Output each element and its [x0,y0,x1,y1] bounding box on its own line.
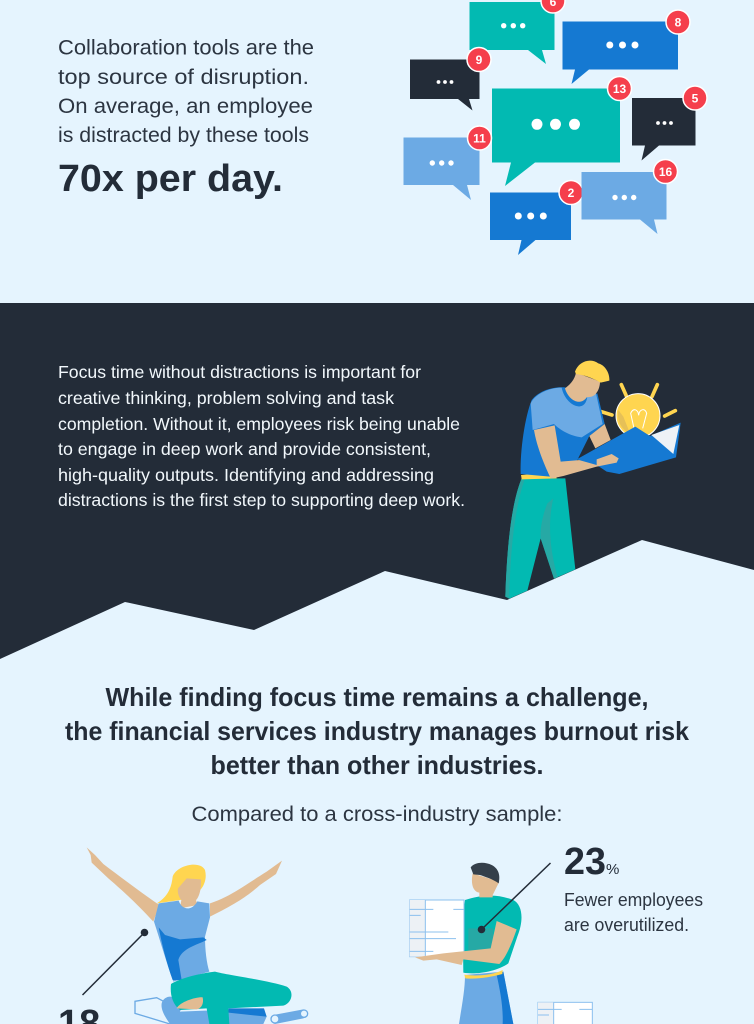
stat description: are overutilized. [564,915,689,935]
bubble: teal 6 [470,0,565,64]
shirt [154,901,210,982]
arms [87,847,282,922]
headline stat: 70x per day: 70x per day. [58,158,283,200]
paper stack on floor [538,1002,592,1024]
stat description: Fewer employees [564,890,703,910]
illustration: woman stretching on mat [87,847,308,1024]
bubble: blue 8 [562,10,690,84]
intro text block: is distracted by these tools [58,124,309,147]
intro text block: On average, an employee [58,95,313,118]
open book [577,423,681,474]
stat: 23 percent: 23% [564,841,619,883]
hair [471,863,499,883]
bubble: light blue 11: 11 [473,132,486,146]
hair [157,865,206,903]
shirt [463,896,521,973]
section heading [65,682,690,780]
stat description [564,890,703,935]
bubble: blue 8: 8 [675,16,682,30]
weights [271,1009,308,1024]
trousers [459,972,513,1024]
bubble: light blue 16: 16 [659,165,672,179]
bubble: blue 2 [490,180,583,255]
bubble: light blue 16 [582,160,678,234]
trousers [505,478,575,599]
mat and bolster [135,998,180,1024]
focus time paragraph [58,362,465,510]
bubble: dark 5: 5 [692,92,699,106]
lightbulb [600,385,675,438]
arm and hands [415,921,517,965]
focus time paragraph: Focus time without distractions is important for [58,362,421,382]
belt [521,472,557,479]
section heading: better than other industries. [210,750,544,780]
bubble: light blue 11 [404,126,492,200]
dark band with mountain edge [0,303,754,659]
bubble: blue 2: 2 [568,186,575,200]
focus time paragraph: distractions is the first step to supporting deep work. [58,490,465,510]
bubble: dark 9 [410,48,491,110]
chat bubbles illustration [404,0,707,255]
sub heading: Compared to a cross-industry sample: [192,803,562,826]
focus time paragraph: to engage in deep work and provide consistent, [58,439,431,459]
callout line: man [478,863,550,933]
section heading: the financial services industry manages burnout risk [65,716,690,746]
shirt [521,387,605,477]
belt [464,970,503,979]
head [472,873,499,897]
hair [575,361,609,383]
focus time paragraph: high-quality outputs. Identifying and addressing [58,465,434,485]
bubble: teal 13: 13 [613,82,626,96]
illustration: man carrying papers [410,863,521,1024]
head and neck [565,373,600,402]
illustration: man reading book with lightbulb [505,361,681,599]
intro text block [58,36,314,147]
callout line: woman [82,929,148,995]
intro text block: Collaboration tools are the [58,36,314,60]
bubble: dark 5 [632,86,707,160]
crossed legs [171,972,291,1024]
bubble: teal 13 [492,76,632,186]
paper stack [410,900,464,957]
focus time paragraph: creative thinking, problem solving and task [58,388,394,408]
bubble: dark 9: 9 [476,53,483,67]
intro text block: top source of disruption. [58,66,309,89]
focus time paragraph: completion. Without it, employees risk being unable [58,414,460,434]
arm and hand [534,425,619,479]
section heading: While finding focus time remains a challenge, [106,682,648,712]
head and neck [178,878,201,908]
